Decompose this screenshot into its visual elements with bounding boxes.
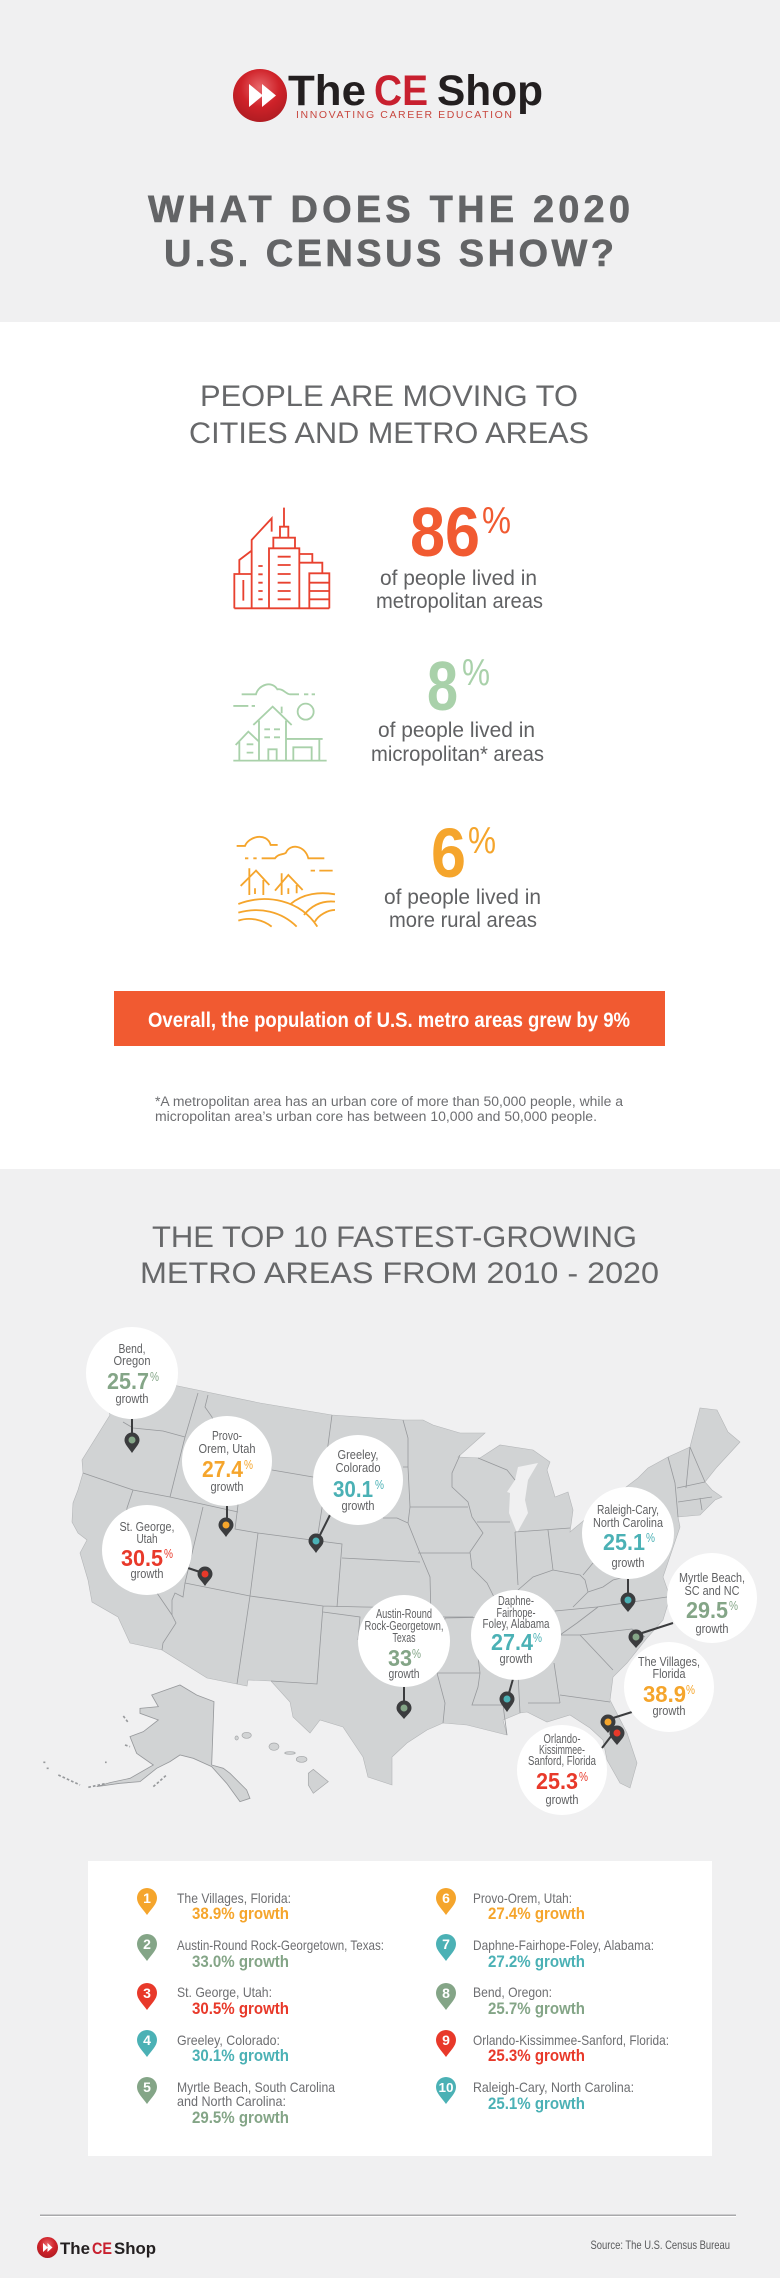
callout: Myrtle Beach, SC and NC: growth: [696, 1621, 728, 1636]
icon: small town houses: [233, 684, 327, 761]
stat: 8%: [371, 647, 544, 766]
callout: The Villages, Florida: The Villages,: [638, 1654, 700, 1669]
list item 7: Daphne-Fairhope-Foley, Alabama:: [473, 1937, 654, 1953]
heading: people are moving: [189, 380, 589, 450]
list item 6: 27.4% growth: [488, 1904, 585, 1923]
heading: top 10 metro areas: [140, 1221, 659, 1290]
callout: The Villages, Florida: Florida: [652, 1666, 686, 1681]
callout: Greeley, Colorado: Greeley,: [338, 1447, 378, 1462]
map: Hawaii: [235, 1732, 328, 1793]
list item 8: Bend, Oregon:: [473, 1984, 552, 2000]
callout: Greeley, Colorado: 30.1: [333, 1476, 373, 1502]
list item 4: 30.1% growth: [192, 2046, 289, 2065]
callout: Austin-Round Rock-Georgetown, Texas: %: [412, 1646, 421, 1661]
list item 4: 4: [143, 2032, 151, 2048]
logo: The CE Shop: INNOVATING CAREER EDUCATION: [296, 109, 512, 121]
logo: footer The CE Shop: Shop: [114, 2239, 156, 2258]
icon: city skyline: [234, 508, 329, 608]
callout: St. George, Utah: 30.5: [121, 1545, 163, 1571]
list item 3: [137, 1983, 289, 2018]
stat: 86%: [376, 493, 543, 613]
callout: Provo-Orem, Utah: Orem, Utah: [198, 1441, 256, 1456]
callout: Austin-Round Rock-Georgetown, Texas: [358, 1595, 450, 1719]
title: WHAT DOES THE 2020: [148, 189, 630, 231]
list item 10: 25.1% growth: [488, 2094, 585, 2113]
title: [148, 189, 630, 275]
panel: header background: [0, 0, 780, 322]
callout: Orlando-Kissimmee-Sanford, Florida: [517, 1725, 624, 1815]
list item 2: 33.0% growth: [192, 1952, 289, 1971]
panel: top 10 background: [0, 1169, 780, 2278]
callout: The Villages, Florida: growth: [652, 1703, 686, 1718]
list item 5: Myrtle Beach, South Carolina: [177, 2079, 335, 2095]
callout: Bend, Oregon: growth: [116, 1391, 148, 1406]
list item 7: 7: [442, 1936, 450, 1952]
heading: top 10 metro areas: THE TOP 10 FASTEST-GROWING: [152, 1221, 637, 1254]
stat: 6%: more rural areas: [389, 909, 537, 932]
callout: Provo-Orem, Utah: 27.4: [202, 1456, 243, 1482]
map: Alaska: [43, 1685, 250, 1802]
stat: 86%: %: [482, 500, 511, 542]
callout: The Villages, Florida: [600, 1642, 714, 1733]
list item 9: 25.3% growth: [488, 2046, 585, 2065]
callout: Daphne-Fairhope-Foley, Alabama: Foley, Alabama: [482, 1616, 550, 1631]
list item 5: [137, 2077, 335, 2127]
stat: 8%: micropolitan* areas: [371, 743, 544, 766]
callout: Orlando-Kissimmee-Sanford, Florida: %: [579, 1769, 588, 1784]
list item 8: 8: [442, 1985, 450, 2001]
stat: 86%: metropolitan areas: [376, 590, 543, 613]
stat: 6%: %: [468, 820, 496, 862]
callout: Austin-Round Rock-Georgetown, Texas: Rock-Georgetown,: [364, 1618, 444, 1633]
callout: Bend, Oregon: 25.7: [107, 1368, 149, 1394]
callout: St. George, Utah: %: [164, 1546, 173, 1561]
list item 10: [436, 2077, 634, 2113]
list item 10: 10: [438, 2080, 454, 2095]
heading: people are moving: CITIES AND METRO AREAS: [189, 417, 589, 450]
list item 1: 38.9% growth: [192, 1904, 289, 1923]
stat: 86%: of people lived in: [380, 567, 537, 590]
callout: Orlando-Kissimmee-Sanford, Florida: 25.3: [536, 1768, 578, 1794]
stat: 6%: 6: [431, 814, 466, 892]
callout: Provo-Orem, Utah: growth: [210, 1479, 244, 1494]
list item 7: 27.2% growth: [488, 1952, 585, 1971]
callout: St. George, Utah: growth: [130, 1566, 164, 1581]
callout: Daphne-Fairhope-Foley, Alabama: 27.4: [491, 1629, 533, 1655]
callout: Greeley, Colorado: growth: [342, 1498, 374, 1513]
callout: Austin-Round Rock-Georgetown, Texas: Texas: [392, 1630, 416, 1645]
callout: Myrtle Beach, SC and NC: SC and NC: [684, 1583, 740, 1598]
callout: Myrtle Beach, SC and NC: Myrtle Beach,: [679, 1570, 745, 1585]
list item 4: Greeley, Colorado:: [177, 2032, 280, 2048]
callout: Myrtle Beach, SC and NC: 29.5: [686, 1597, 728, 1623]
callout: Daphne-Fairhope-Foley, Alabama: Daphne-: [498, 1593, 534, 1608]
source note: Source: The U.S. Census Bureau: [590, 2238, 730, 2252]
stat: 8%: %: [462, 652, 490, 694]
list item 1: The Villages, Florida:: [177, 1890, 291, 1906]
list item 1: [137, 1888, 291, 1923]
stat: 8%: 8: [427, 647, 458, 725]
logo: The CE Shop: Shop: [437, 67, 543, 115]
list item 2: [137, 1934, 384, 1971]
callout: The Villages, Florida: %: [686, 1682, 695, 1697]
callout: Daphne-Fairhope-Foley, Alabama: [471, 1590, 561, 1712]
callout: Austin-Round Rock-Georgetown, Texas: growth: [388, 1666, 420, 1681]
list item 2: 2: [143, 1936, 151, 1952]
callout: Austin-Round Rock-Georgetown, Texas: 33: [388, 1645, 412, 1671]
footnote: [155, 1094, 623, 1124]
list item 6: 6: [442, 1890, 450, 1906]
callout: Myrtle Beach, SC and NC: [628, 1553, 757, 1648]
list item 5: 5: [143, 2079, 151, 2095]
callout: Provo-Orem, Utah: Provo-: [212, 1428, 242, 1443]
callout: Raleigh-Cary, North Carolina: Raleigh-Cary,: [597, 1502, 659, 1517]
logo: footer The CE Shop: [37, 2237, 156, 2258]
callout: Orlando-Kissimmee-Sanford, Florida: Kissimmee-: [539, 1742, 585, 1757]
heading: top 10 metro areas: METRO AREAS FROM 2010 - 2020: [140, 1257, 659, 1290]
list item 3: 3: [143, 1985, 151, 2001]
list item 6: [436, 1888, 585, 1923]
callout: Raleigh-Cary, North Carolina: [582, 1487, 674, 1612]
panel: metro stats background: [0, 322, 780, 1169]
callout: Raleigh-Cary, North Carolina: North Carolina: [593, 1515, 664, 1530]
callout: Raleigh-Cary, North Carolina: growth: [612, 1555, 644, 1570]
callout: overall growth banner: Overall, the population of U.S. metro areas grew by 9%: [148, 1009, 630, 1032]
panel: ranked list: [88, 1861, 712, 2156]
callout: Greeley, Colorado: [308, 1435, 403, 1553]
list item 1: 1: [143, 1890, 151, 1906]
callout: Orlando-Kissimmee-Sanford, Florida: growth: [546, 1792, 578, 1807]
callout: Bend, Oregon: %: [150, 1369, 159, 1384]
callout: St. George, Utah: St. George,: [120, 1519, 174, 1534]
callout: Raleigh-Cary, North Carolina: 25.1: [603, 1529, 645, 1555]
callout: Raleigh-Cary, North Carolina: %: [646, 1530, 655, 1545]
callout: Daphne-Fairhope-Foley, Alabama: %: [533, 1630, 542, 1645]
list item 4: [137, 2030, 289, 2065]
list item 6: Provo-Orem, Utah:: [473, 1890, 572, 1906]
list item 3: St. George, Utah:: [177, 1984, 272, 2000]
map: United States: [43, 1375, 740, 1802]
footnote: *A metropolitan area has an urban core of more than 50,000 people, while a: [155, 1094, 623, 1109]
callout: Bend, Oregon: Bend,: [118, 1341, 146, 1356]
list item 2: Austin-Round Rock-Georgetown, Texas:: [177, 1937, 384, 1953]
callout: St. George, Utah: [102, 1505, 212, 1595]
list item 9: Orlando-Kissimmee-Sanford, Florida:: [473, 2032, 669, 2048]
stat: 8%: of people lived in: [378, 719, 535, 742]
title: U.S. CENSUS SHOW?: [164, 233, 614, 275]
callout: Provo-Orem, Utah: %: [244, 1457, 253, 1472]
logo: footer The CE Shop: The: [60, 2239, 90, 2258]
callout: Greeley, Colorado: %: [375, 1477, 384, 1492]
stat: 6%: of people lived in: [384, 886, 541, 909]
list item 5: 29.5% growth: [192, 2108, 289, 2127]
callout: overall growth banner: [114, 991, 665, 1046]
footnote: micropolitan area’s urban core has between 10,000 and 50,000 people.: [155, 1109, 597, 1124]
logo: The CE Shop: The: [288, 67, 366, 115]
callout: St. George, Utah: Utah: [136, 1531, 158, 1546]
list item 3: 30.5% growth: [192, 1999, 289, 2018]
icon: rural farm hills: [237, 837, 335, 927]
callout: Austin-Round Rock-Georgetown, Texas: Austin-Round: [376, 1606, 432, 1621]
logo: footer The CE Shop: CE: [92, 2239, 112, 2258]
stat: 6%: [384, 814, 541, 932]
callout: Daphne-Fairhope-Foley, Alabama: Fairhope-: [496, 1605, 536, 1620]
callout: Bend, Oregon: Oregon: [114, 1353, 150, 1368]
list item 8: [436, 1983, 585, 2018]
logo: The CE Shop: CE: [374, 67, 428, 115]
callout: Greeley, Colorado: Colorado: [336, 1460, 380, 1475]
list item 8: 25.7% growth: [488, 1999, 585, 2018]
callout: Orlando-Kissimmee-Sanford, Florida: Sanford, Florida: [528, 1753, 597, 1768]
callout: Bend, Oregon: [86, 1327, 178, 1453]
list item 9: [436, 2030, 669, 2065]
stat: 86%: 86: [410, 493, 480, 571]
callout: Myrtle Beach, SC and NC: %: [729, 1598, 738, 1613]
callout: Provo-Orem, Utah: [182, 1416, 272, 1537]
list item 7: [436, 1934, 654, 1971]
callout: Orlando-Kissimmee-Sanford, Florida: Orlando-: [544, 1731, 580, 1746]
list item 9: 9: [442, 2032, 450, 2048]
callout: The Villages, Florida: 38.9: [643, 1681, 686, 1707]
list item 5: and North Carolina:: [177, 2093, 286, 2109]
heading: people are moving: PEOPLE ARE MOVING TO: [200, 380, 578, 413]
callout: Daphne-Fairhope-Foley, Alabama: growth: [500, 1651, 532, 1666]
logo: The CE Shop: [233, 67, 543, 122]
list item 10: Raleigh-Cary, North Carolina:: [473, 2079, 634, 2095]
